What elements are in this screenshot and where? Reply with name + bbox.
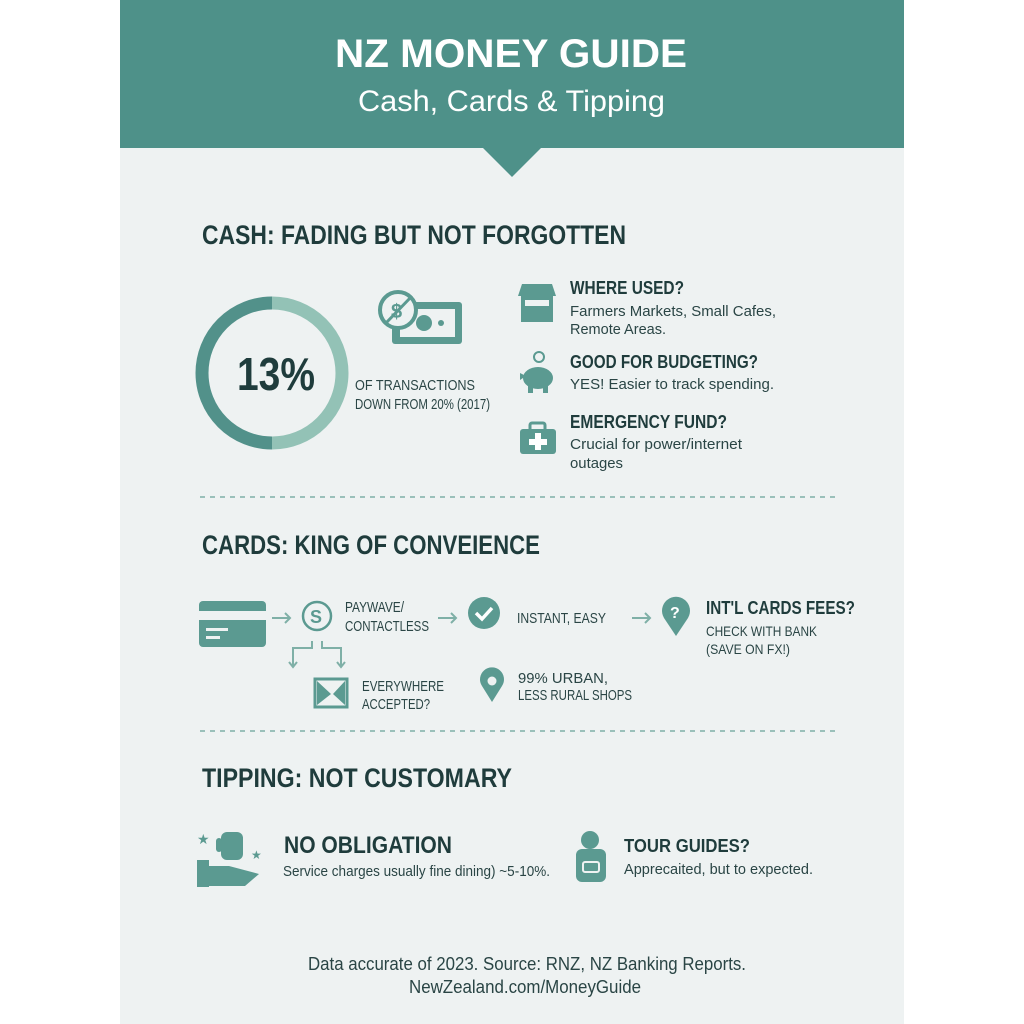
intl card fees: (SAVE ON FX!) xyxy=(706,641,790,657)
tour guides: TOUR GUIDES? xyxy=(624,836,750,856)
footer: NewZealand.com/MoneyGuide xyxy=(409,977,641,997)
intl card fees xyxy=(706,598,855,657)
icon: no cash: $ xyxy=(391,301,402,323)
heading: cash: CASH: FADING BUT NOT FORGOTTEN xyxy=(202,220,626,250)
footer xyxy=(308,954,746,997)
title: NZ MONEY GUIDE xyxy=(335,32,687,76)
everywhere accepted: ACCEPTED? xyxy=(362,696,430,713)
icon: question pin xyxy=(662,597,690,636)
heading: cards: CARDS: KING OF CONVEIENCE xyxy=(202,530,540,560)
intl card fees: CHECK WITH BANK xyxy=(706,623,818,639)
emergency fund: EMERGENCY FUND? xyxy=(570,412,727,432)
icon: credit card xyxy=(199,601,266,647)
heading: tipping: TIPPING: NOT CUSTOMARY xyxy=(202,763,512,793)
icon: paywave: S xyxy=(310,607,322,627)
good for budgeting: YES! Easier to track spending. xyxy=(570,376,774,393)
subtitle: Cash, Cards & Tipping xyxy=(358,85,665,118)
icon: hand xyxy=(197,831,262,887)
text: of transactions xyxy=(355,377,490,413)
donut chart 13%: 13% xyxy=(237,348,315,400)
emergency fund: outages xyxy=(570,455,623,472)
intl card fees: INT'L CARDS FEES? xyxy=(706,598,855,618)
arrows xyxy=(272,613,650,667)
where used: Remote Areas. xyxy=(570,321,666,338)
text: of transactions: OF TRANSACTIONS xyxy=(355,377,475,394)
text: of transactions: DOWN FROM 20% (2017) xyxy=(355,396,490,413)
everywhere accepted xyxy=(362,678,444,713)
tour guides: Apprecaited, but to expected. xyxy=(624,861,813,878)
where used xyxy=(570,278,776,338)
emergency fund: Crucial for power/internet xyxy=(570,436,743,453)
footer: Data accurate of 2023. Source: RNZ, NZ Banking Reports. xyxy=(308,954,746,974)
urban: LESS RURAL SHOPS xyxy=(518,687,632,704)
icon: hand: ★ xyxy=(197,831,210,847)
emergency fund xyxy=(570,412,743,472)
icon: backpack guide xyxy=(576,831,606,882)
icon: first aid kit xyxy=(520,423,556,454)
panel background xyxy=(120,0,904,1024)
good for budgeting xyxy=(570,352,774,393)
icon: location pin xyxy=(480,667,504,702)
icon: no cash xyxy=(380,292,462,344)
urban xyxy=(518,670,632,704)
icon: hand: ★ xyxy=(251,848,262,862)
where used: WHERE USED? xyxy=(570,278,684,298)
header xyxy=(120,0,904,177)
urban: 99% URBAN, xyxy=(518,670,608,687)
icon: envelope xyxy=(315,679,347,707)
instant easy: INSTANT, EASY xyxy=(517,610,606,627)
icon: question pin: ? xyxy=(670,605,680,622)
paywave text xyxy=(345,599,429,635)
no obligation: Service charges usually fine dining) ~5-10%. xyxy=(283,863,550,880)
icon: market stall xyxy=(518,284,556,322)
icon: piggy bank xyxy=(520,352,553,393)
tour guides xyxy=(624,836,813,878)
icon: paywave xyxy=(303,602,331,630)
good for budgeting: GOOD FOR BUDGETING? xyxy=(570,352,758,372)
no obligation: NO OBLIGATION xyxy=(284,832,452,859)
no obligation xyxy=(283,832,550,880)
icon: check xyxy=(468,597,500,629)
paywave text: PAYWAVE/ xyxy=(345,599,405,616)
where used: Farmers Markets, Small Cafes, xyxy=(570,303,776,320)
donut chart 13% xyxy=(202,303,342,443)
everywhere accepted: EVERYWHERE xyxy=(362,678,444,695)
paywave text: CONTACTLESS xyxy=(345,618,429,635)
